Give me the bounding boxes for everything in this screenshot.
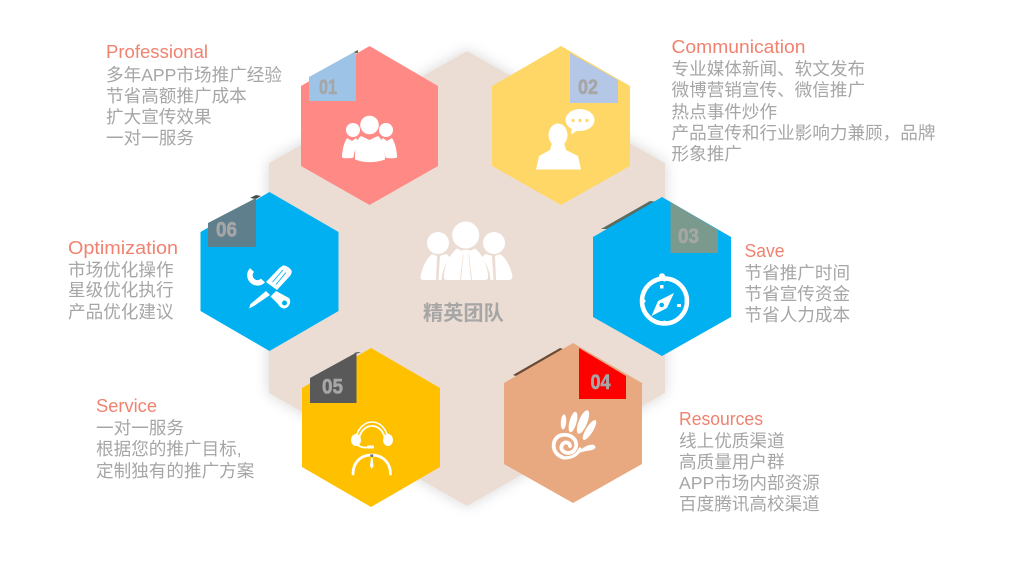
badge: 04: 04 — [590, 371, 611, 394]
badge: 03 — [670, 202, 718, 253]
text block: Communication: 产品宣传和行业影响力兼顾，品牌 — [672, 123, 935, 143]
text block: Optimization: 市场优化操作 — [68, 260, 174, 280]
text block: Optimization — [68, 237, 178, 322]
text block: Service: 一对一服务 — [96, 418, 184, 438]
text block: Communication: 专业媒体新闻、软文发布 — [672, 59, 865, 79]
text block: Service: Service — [96, 395, 157, 416]
panel: 04 Resources hexagon — [504, 343, 642, 503]
text block: Resources: 百度腾讯高校渠道 — [679, 494, 820, 514]
text block: Service: 定制独有的推广方案 — [96, 461, 255, 481]
text block: Professional: 一对一服务 — [106, 128, 194, 148]
icon: person with speech bubble — [536, 109, 594, 170]
panel: 05 Service hexagon — [302, 348, 440, 507]
badge: 02: 02 — [578, 76, 598, 99]
text block: Resources: 线上优质渠道 — [679, 431, 785, 451]
text block: Communication — [672, 36, 935, 164]
badge: 02 — [570, 53, 618, 103]
text block: Optimization: 产品优化建议 — [68, 302, 174, 322]
icon: three people — [342, 116, 397, 162]
text block: Communication: 微博营销宣传、微信推广 — [672, 80, 865, 100]
text block: Professional: 节省高额推广成本 — [106, 86, 247, 106]
badge: 01: 01 — [319, 76, 337, 99]
panel: 02 Communication hexagon — [492, 46, 630, 205]
text block: Professional: Professional — [106, 41, 208, 62]
text block: Professional — [106, 41, 282, 148]
text block: Resources: APP市场内部资源 — [679, 473, 820, 493]
icon: wrench and screwdriver — [249, 265, 292, 308]
badge: 01 — [309, 50, 358, 101]
text block: Save — [744, 240, 850, 325]
text block: Optimization: 星级优化执行 — [68, 280, 174, 300]
badge: 03: 03 — [678, 225, 699, 248]
text block: Resources — [679, 408, 820, 514]
central background hexagon — [269, 51, 665, 506]
badge: 04 — [579, 348, 626, 399]
icon: customer service agent — [351, 422, 393, 474]
text block: Service: 根据您的推广目标, — [96, 439, 242, 459]
text block: Professional: 扩大宣传效果 — [106, 107, 212, 127]
text block: Service — [96, 395, 255, 481]
panel: 06 Optimization hexagon — [200, 192, 338, 351]
center icon: team of three — [420, 222, 512, 280]
panel: 03 Save hexagon — [593, 197, 731, 356]
badge: 05 — [310, 352, 356, 403]
text block: Resources: 高质量用户群 — [679, 452, 785, 472]
badge: 06 — [208, 198, 256, 247]
text block: Communication: 热点事件炒作 — [672, 102, 777, 122]
text block: Communication: 形象推广 — [672, 144, 742, 164]
icon: compass — [642, 273, 688, 324]
text block: Professional: 多年APP市场推广经验 — [106, 65, 282, 85]
text block: Optimization: Optimization — [68, 237, 178, 258]
badge: 05: 05 — [322, 376, 343, 398]
badge: 06: 06 — [216, 218, 237, 242]
panel: 01 Professional hexagon — [301, 46, 438, 205]
text block: Save: 节省推广时间 — [744, 263, 850, 283]
text block: Save: 节省人力成本 — [744, 305, 850, 325]
text block: Resources: Resources — [679, 408, 763, 429]
icon: spiral hand — [554, 409, 599, 458]
text block: Save: 节省宣传资金 — [744, 284, 850, 304]
center label: 精英团队 — [423, 302, 504, 325]
text block: Communication: Communication — [672, 36, 806, 57]
text block: Save: Save — [744, 240, 784, 261]
